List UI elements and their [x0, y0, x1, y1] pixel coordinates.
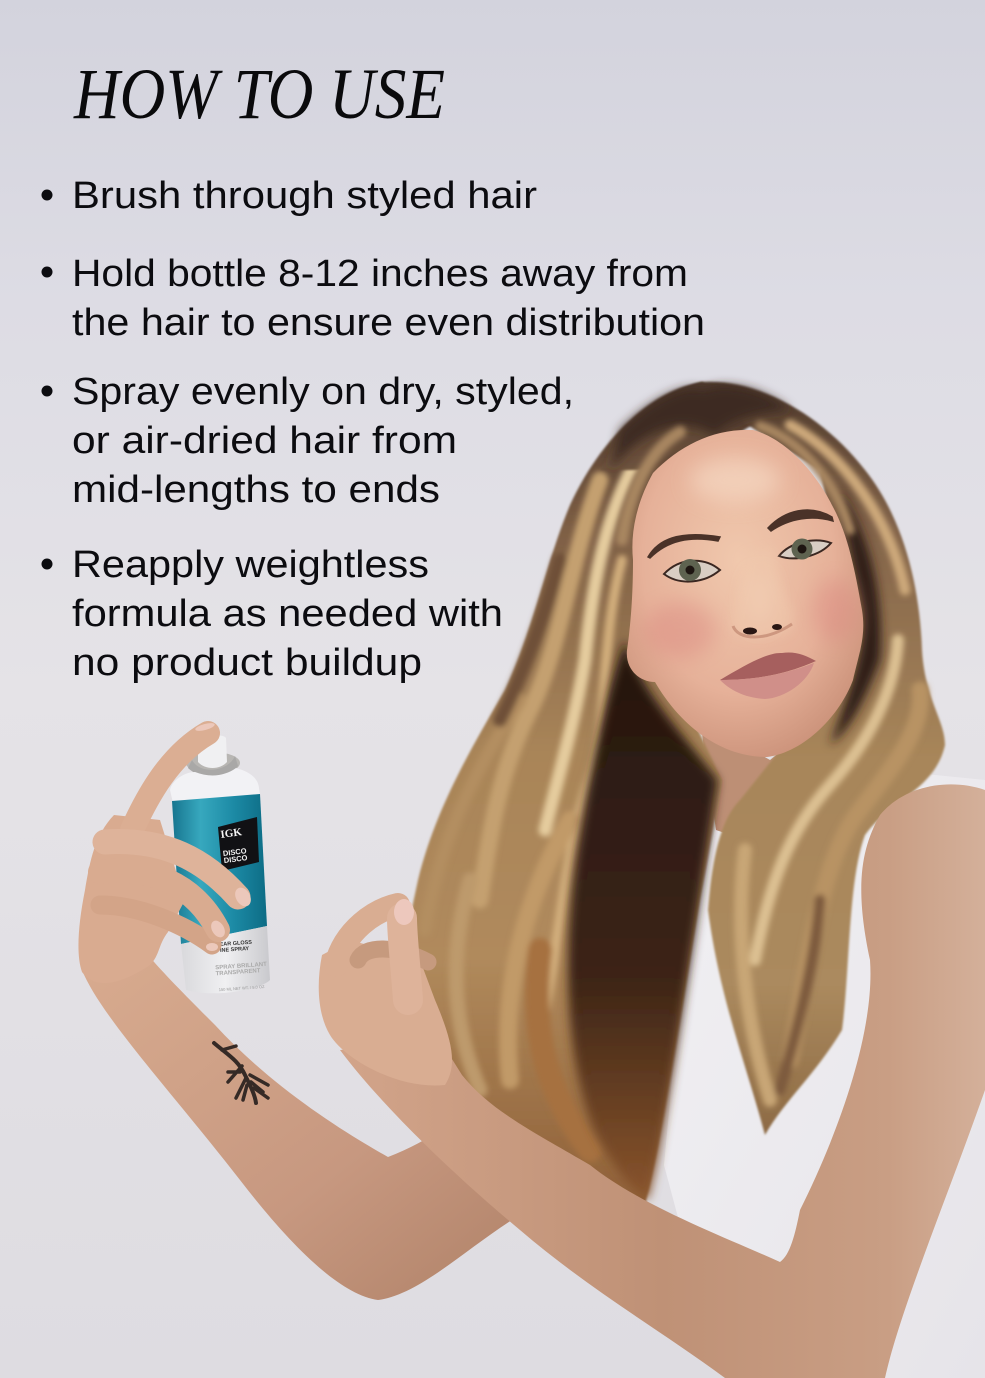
step 4	[42, 544, 503, 684]
blonde strands, right side	[741, 425, 920, 1100]
step 2	[42, 253, 705, 344]
step 1: Brush through styled hair	[72, 175, 537, 217]
bottle teal body	[172, 794, 267, 944]
bottle silver base	[181, 926, 270, 993]
step 4: no product buildup	[72, 642, 422, 684]
bottle nozzle	[186, 735, 240, 777]
thumb	[402, 918, 408, 1000]
hair parting shadow	[610, 385, 790, 470]
middle fingers	[358, 949, 428, 962]
palm	[78, 815, 185, 983]
ring finger	[100, 905, 212, 945]
bullet list	[42, 175, 705, 684]
brand mark: IGK	[220, 826, 243, 841]
step 3	[42, 371, 574, 511]
step 3: Spray evenly on dry, styled,	[72, 371, 574, 413]
base text: SPRAY BRILLANT	[215, 962, 267, 971]
step 3: mid-lengths to ends	[72, 469, 440, 511]
product name: DISCO	[223, 853, 248, 865]
right hand	[319, 899, 452, 1086]
index finger	[105, 842, 238, 897]
forehead and cheek highlight	[690, 458, 780, 626]
left eyebrow	[648, 535, 720, 558]
hair: right side and crown	[600, 382, 945, 1135]
right eyebrow	[768, 510, 833, 531]
nose	[732, 548, 793, 638]
middle finger	[100, 871, 218, 930]
hairline highlights	[622, 426, 850, 540]
product name: DISCO	[222, 846, 247, 858]
tattoo	[214, 1043, 268, 1103]
index finger	[336, 905, 398, 965]
dark hair beside the cheek	[830, 490, 881, 745]
left eye	[664, 559, 720, 582]
face	[627, 430, 863, 757]
step 3: or air-dried hair from	[72, 420, 457, 462]
bottle label box	[218, 817, 259, 871]
base text: INE SPRAY	[220, 946, 250, 954]
right eye	[779, 538, 831, 560]
left forearm and upper arm	[82, 955, 520, 1300]
base text: TRANSPARENT	[215, 968, 261, 977]
blush	[644, 578, 857, 658]
step 4: Reapply weightless	[72, 544, 429, 586]
thumb	[132, 733, 208, 830]
finger nails	[195, 722, 254, 951]
base text: EAR GLOSS	[219, 940, 253, 948]
neck	[700, 690, 870, 840]
white tank top	[664, 772, 985, 1378]
bottle shoulder	[170, 768, 260, 803]
step 4: formula as needed with	[72, 593, 503, 635]
step 2: the hair to ensure even distribution	[72, 302, 705, 344]
title: HOW TO USE	[73, 54, 445, 134]
spray bottle	[170, 735, 270, 993]
step 2: Hold bottle 8-12 inches away from	[72, 253, 688, 295]
right arm and shoulder	[340, 784, 985, 1378]
hair: back left mass	[407, 382, 760, 1205]
left hand holding bottle	[78, 722, 254, 983]
thumb nail	[394, 899, 414, 925]
base text: 150 ML NET WT. / 5.0 OZ	[219, 984, 265, 992]
dark under-layer of hair	[568, 640, 718, 1200]
base text	[213, 939, 269, 992]
lips	[720, 652, 816, 699]
blonde strands, left side	[425, 440, 650, 1150]
